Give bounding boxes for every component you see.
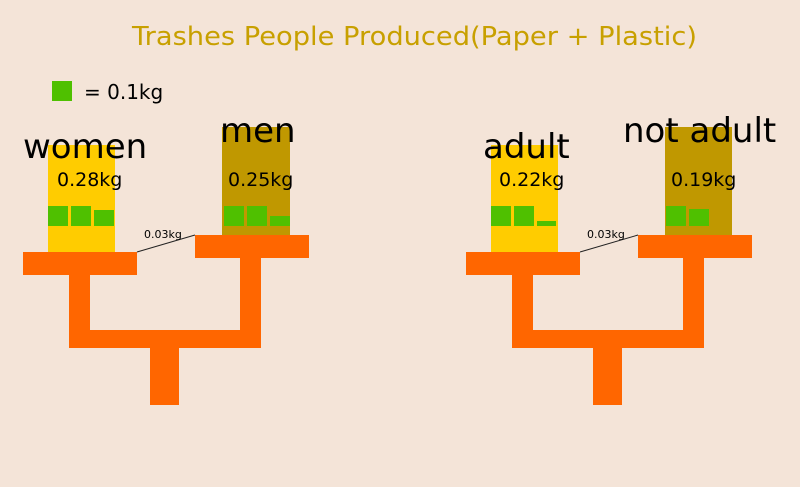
difference callout: age — [580, 228, 638, 252]
scale stand: gender — [23, 235, 309, 405]
difference callout: gender — [137, 228, 195, 252]
panel: gender scale — [23, 111, 309, 405]
difference callout: age: 0.03kg — [587, 228, 625, 241]
panel: age scale — [466, 111, 776, 405]
legend: = 0.1kg — [84, 80, 163, 104]
bin: adult: 0.22kg — [499, 169, 564, 191]
bin: men: men — [220, 111, 296, 151]
bin: not adult — [623, 111, 776, 235]
bin: not adult: not adult — [623, 111, 776, 151]
difference callout: gender: 0.03kg — [144, 228, 182, 241]
bin: adult — [483, 127, 570, 252]
bin: women: 0.28kg — [57, 169, 122, 191]
bin: adult: adult — [483, 127, 570, 167]
scale stand: age — [466, 235, 752, 405]
bin: men: 0.25kg — [228, 169, 293, 191]
title: Trashes People Produced(Paper + Plastic) — [131, 22, 697, 52]
bin: not adult: 0.19kg — [671, 169, 736, 191]
bin: men — [220, 111, 296, 235]
bin: women: women — [23, 127, 147, 167]
bin: women — [23, 127, 147, 252]
